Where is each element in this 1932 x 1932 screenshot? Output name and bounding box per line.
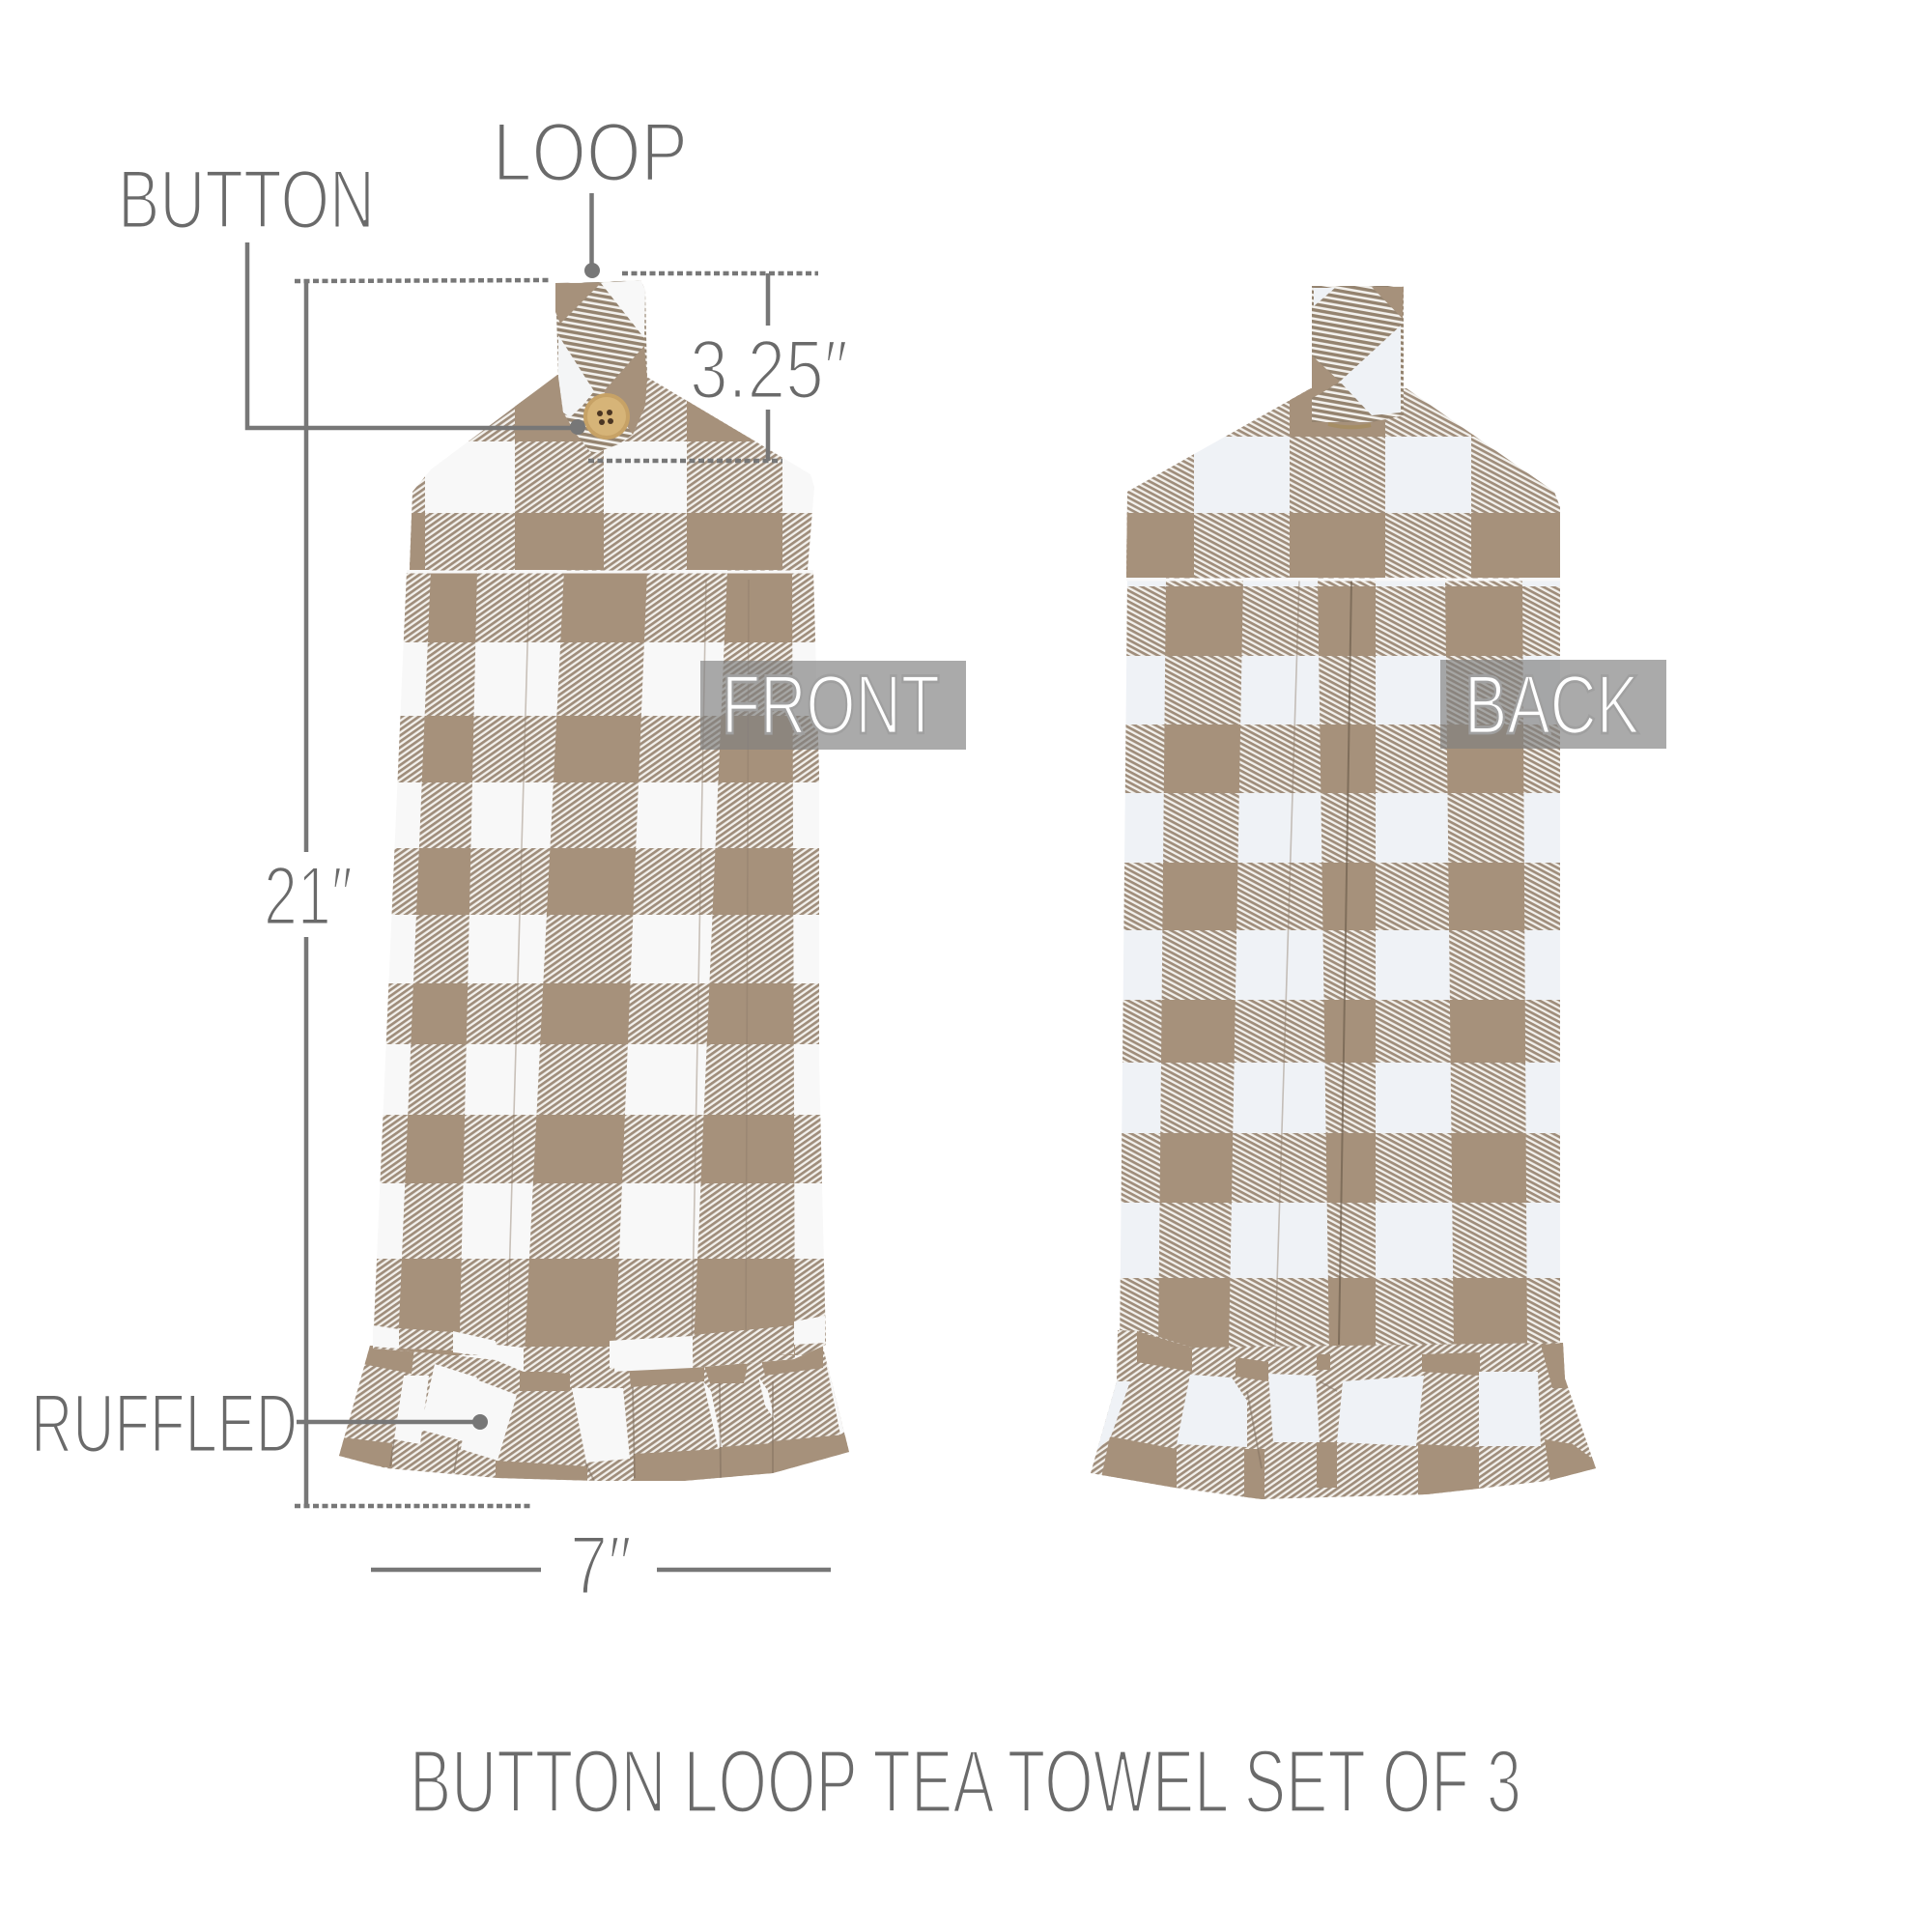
front tag: FRONT [722, 659, 940, 752]
label: loop: LOOP [493, 106, 688, 199]
front towel: stitched hem [373, 1316, 825, 1370]
label: button [118, 154, 585, 435]
back towel: ruffle [1091, 1330, 1596, 1499]
infographic canvas [37, 124, 1666, 1812]
back tag: BACK [1464, 659, 1639, 752]
back towel: body with centre seam [1111, 576, 1565, 1358]
back towel: shoulder and waistband [1126, 388, 1560, 578]
back towel [1082, 286, 1604, 1507]
front towel: pleated body [367, 568, 831, 1379]
label: ruffled: RUFFLED [31, 1378, 298, 1470]
dimension: 7 inch width: 7″ [570, 1520, 632, 1612]
icon: wooden button [583, 393, 630, 440]
back towel: hanging loop [1312, 286, 1404, 427]
dimension: 3.25 inch loop height: 3.25″ [690, 324, 848, 416]
label: button: BUTTON [118, 154, 375, 246]
front towel: hanging loop [555, 280, 647, 454]
front towel [328, 280, 860, 1492]
front towel: ruffle [339, 1346, 849, 1481]
dimension: 21 inch height [261, 280, 549, 1506]
dimension: 21 inch height: 21″ [264, 850, 353, 943]
front towel: shoulder and waistband [406, 367, 821, 572]
label: loop [493, 106, 688, 278]
